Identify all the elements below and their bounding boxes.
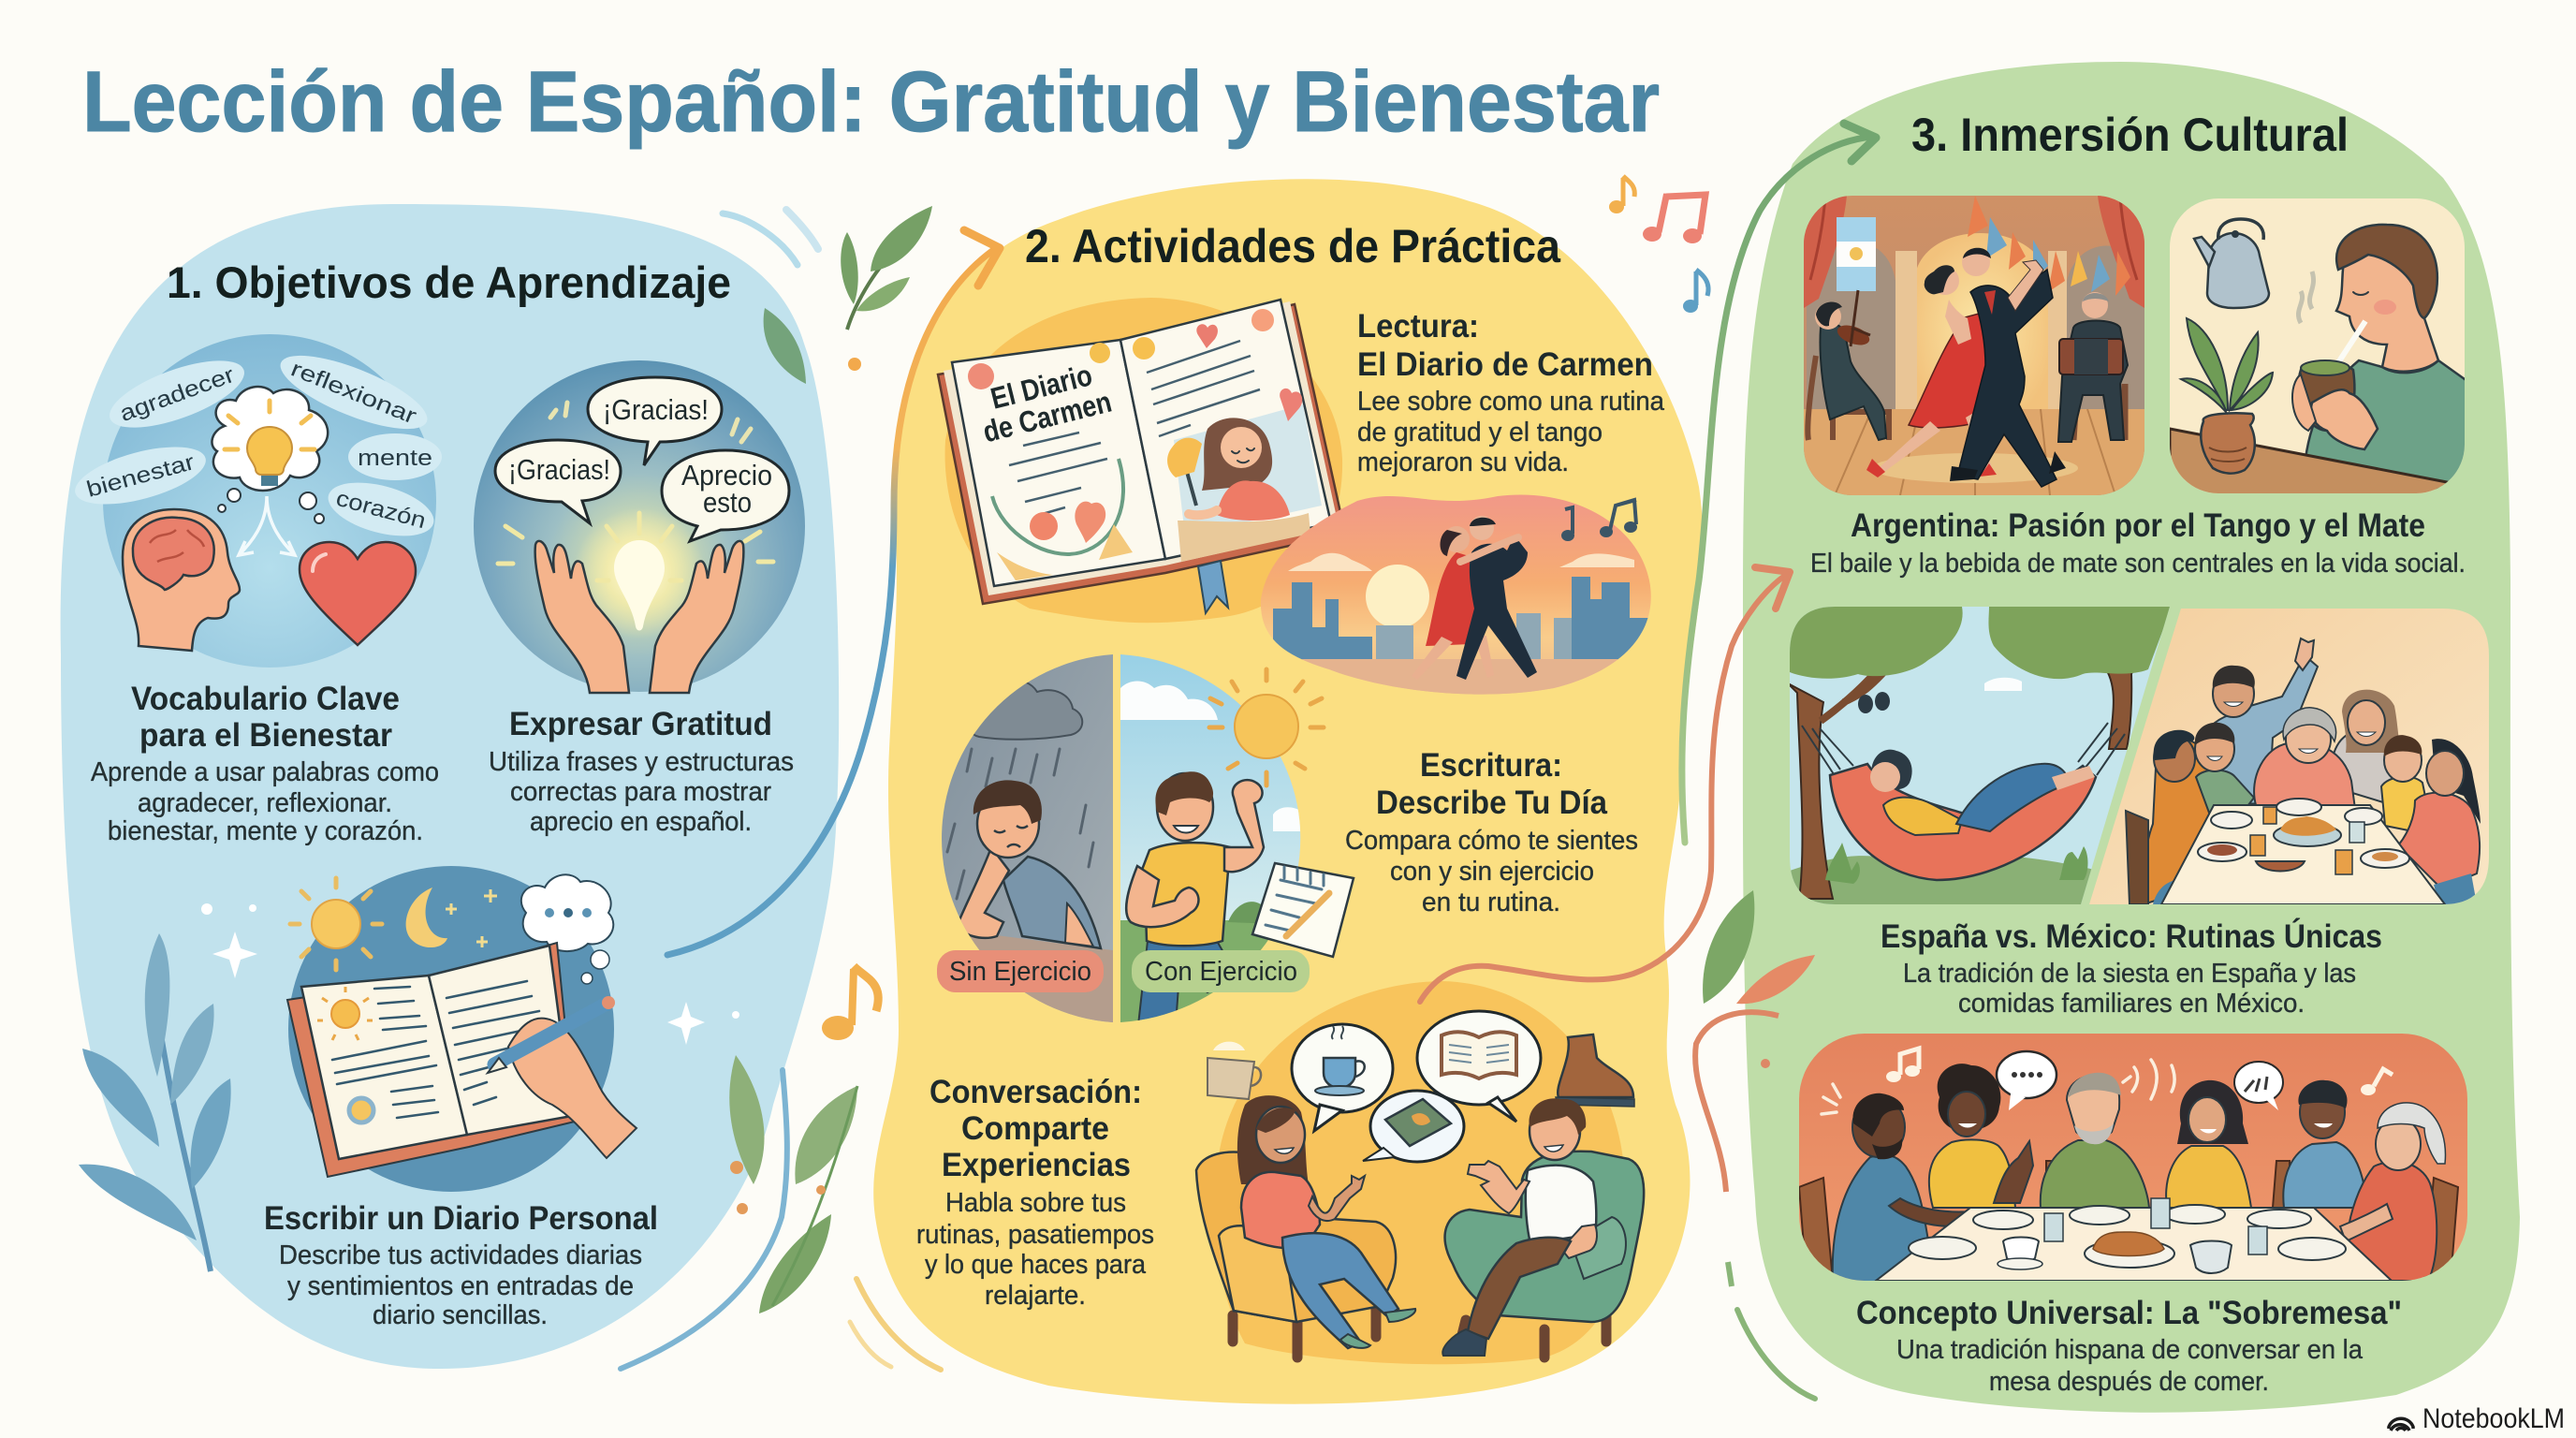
illustration: tango al atardecer xyxy=(1261,494,1651,695)
text: expresar gratitud: aprecio en español. xyxy=(530,807,752,837)
arrow: objetivos a actividades xyxy=(667,230,1000,955)
text: escritura: Describe Tu Día xyxy=(1376,785,1608,821)
text: espana vs mexico: comidas familiares en México. xyxy=(1958,989,2305,1019)
icon: orange music note xyxy=(822,966,878,1040)
text: argentina xyxy=(1810,507,2466,579)
illustration: gratitud: ¡Gracias! xyxy=(603,393,709,426)
text: conversacion: Experiencias xyxy=(942,1147,1131,1183)
text: argentina: Argentina: Pasión por el Tango y el Mate xyxy=(1851,507,2425,544)
text: expresar gratitud xyxy=(489,706,794,837)
label: sin ejercicio: Sin Ejercicio xyxy=(949,957,1091,987)
illustration: vocabulario xyxy=(69,334,442,668)
panel: objetivos de aprendizaje xyxy=(61,204,839,1369)
arrow: actividades a inmersion verde xyxy=(1682,124,1876,843)
heading: objetivos: 1. Objetivos de Aprendizaje xyxy=(167,257,731,307)
illustration: sobremesa xyxy=(1799,1034,2467,1290)
text: concepto universal: Concepto Universal: La "Sobremesa" xyxy=(1856,1295,2402,1331)
text: conversacion xyxy=(916,1074,1154,1311)
text: escribir un diario: diario sencillas. xyxy=(373,1300,548,1330)
text: lectura: El Diario de Carmen xyxy=(1357,346,1653,383)
text: lectura: Lectura: xyxy=(1357,308,1479,345)
illustration: el diario de carmen xyxy=(938,298,1345,623)
text: espana vs mexico: La tradición de la siesta en España y las xyxy=(1903,959,2356,989)
label: con ejercicio: Con Ejercicio xyxy=(1145,957,1297,987)
illustration: gratitud: ¡Gracias! xyxy=(508,453,610,486)
illustration: vocabulario: corazón xyxy=(333,486,429,534)
panel: actividades de practica xyxy=(873,179,1703,1404)
decoration: sparkles xyxy=(201,903,739,1045)
illustration: tango argentino xyxy=(1804,196,2148,495)
illustration: gratitud: Aprecio xyxy=(681,459,772,492)
text: espana vs mexico xyxy=(1881,917,2382,1019)
text: escritura: en tu rutina. xyxy=(1422,888,1560,917)
text: escritura xyxy=(1345,747,1638,917)
illustration: siesta en espana xyxy=(1788,607,2174,908)
illustration: diario personal xyxy=(287,866,637,1192)
illustration: vocabulario: reflexionar xyxy=(287,356,420,430)
text: expresar gratitud: Utiliza frases y estructuras xyxy=(489,747,794,777)
panel background: yellow blob xyxy=(873,179,1703,1404)
text: concepto universal: mesa después de comer. xyxy=(1989,1367,2269,1397)
panel background: green blob xyxy=(1743,62,2520,1413)
text: conversacion: Comparte xyxy=(961,1110,1109,1147)
panel: inmersion cultural xyxy=(1743,62,2520,1413)
illustration: el diario de carmen: El Diario xyxy=(988,358,1095,416)
heading: actividades: 2. Actividades de Práctica xyxy=(1025,220,1561,272)
illustration: bailarines xyxy=(1412,500,1637,680)
text: concepto universal: Una tradición hispana de conversar en la xyxy=(1896,1335,2364,1365)
text: vocabulario clave xyxy=(91,681,439,846)
illustration: conversacion xyxy=(1196,981,1644,1364)
illustration: vocabulario: mente xyxy=(358,446,432,471)
title: Lección de Español: Gratitud y Bienestar xyxy=(82,54,1660,150)
illustration: mate xyxy=(2170,198,2471,496)
text: escribir un diario xyxy=(264,1200,658,1330)
decoration: blue leaves xyxy=(79,933,231,1271)
illustration: vocabulario: bienestar xyxy=(84,449,198,503)
panel background: blue blob xyxy=(61,204,839,1369)
decoration: leaves and curve by panel 3 xyxy=(1695,890,1815,1399)
illustration: gratitud: esto xyxy=(703,486,752,519)
text: espana vs mexico: España vs. México: Rutinas Únicas xyxy=(1881,917,2382,955)
decoration: green leaves bottom xyxy=(729,1055,857,1313)
text: escritura: Compara cómo te sientes xyxy=(1345,826,1638,856)
text: escribir un diario: Describe tus actividades diarias xyxy=(279,1240,642,1270)
text: conversacion: y lo que haces para xyxy=(925,1250,1147,1280)
text: vocabulario clave: bienestar, mente y corazón. xyxy=(108,816,423,846)
text: escribir un diario: Escribir un Diario Personal xyxy=(264,1200,658,1237)
text: vocabulario clave: Vocabulario Clave xyxy=(131,681,400,717)
text: vocabulario clave: agradecer, reflexionar. xyxy=(138,788,392,818)
arrow: conversacion a inmersion naranja xyxy=(1420,567,1790,1002)
decoration: yellow swooshes xyxy=(850,1279,941,1370)
illustration: gratitud xyxy=(474,360,805,693)
text: conversacion: Habla sobre tus xyxy=(945,1188,1126,1218)
text: concepto universal xyxy=(1856,1295,2402,1397)
decoration: blue swooshes xyxy=(621,210,818,1369)
decoration: green leaves left xyxy=(764,206,932,384)
illustration: familia en mexico xyxy=(2083,607,2495,906)
text: expresar gratitud: correctas para mostrar xyxy=(510,777,771,807)
text: escritura: con y sin ejercicio xyxy=(1390,857,1594,887)
icons: top music notes xyxy=(1609,176,1708,313)
text: argentina: El baile y la bebida de mate son centrales en la vida social. xyxy=(1810,549,2466,579)
text: lectura: mejoraron su vida. xyxy=(1357,448,1569,477)
text: conversacion: Conversación: xyxy=(929,1074,1142,1110)
text: lectura xyxy=(1357,308,1665,477)
text: escritura: Escritura: xyxy=(1420,747,1562,784)
text: lectura: Lee sobre como una rutina xyxy=(1357,387,1665,417)
text: conversacion: relajarte. xyxy=(985,1281,1086,1311)
label: sin ejercicio xyxy=(937,950,1104,992)
text: conversacion: rutinas, pasatiempos xyxy=(916,1220,1154,1250)
text: vocabulario clave: para el Bienestar xyxy=(139,717,392,754)
label: con ejercicio xyxy=(1132,950,1310,992)
text: lectura: de gratitud y el tango xyxy=(1357,418,1603,448)
text: escribir un diario: y sentimientos en entradas de xyxy=(287,1271,634,1301)
text: vocabulario clave: Aprende a usar palabras como xyxy=(91,757,439,787)
illustration: el diario de carmen: de Carmen xyxy=(979,385,1115,448)
text: expresar gratitud: Expresar Gratitud xyxy=(509,706,772,742)
heading: inmersion: 3. Inmersión Cultural xyxy=(1911,109,2349,161)
illustration: vocabulario: agradecer xyxy=(116,362,238,427)
illustration: sin y con ejercicio xyxy=(927,651,1354,1025)
